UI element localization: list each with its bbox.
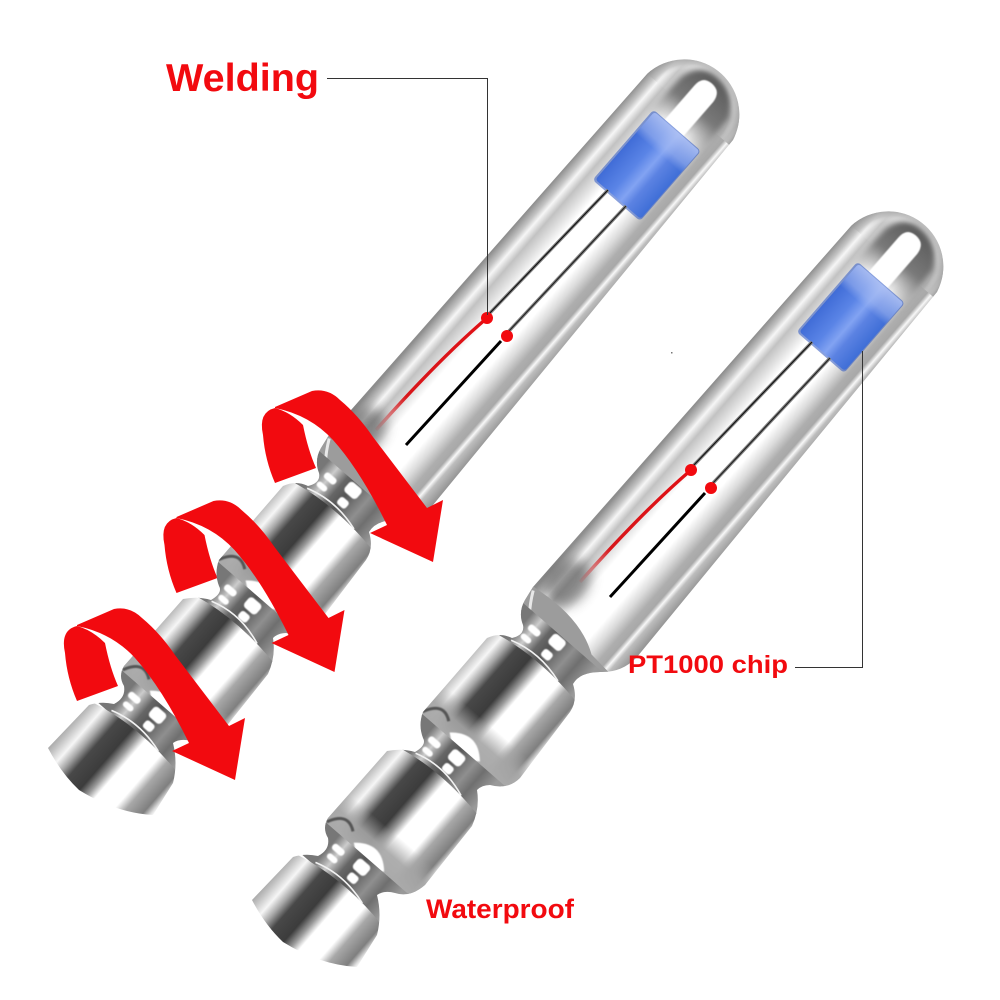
right probe (202, 150, 1000, 1000)
neck 2 (372, 694, 542, 848)
label: PT1000 chip: PT1000 chip (628, 651, 788, 679)
icon: PT1000 chip (797, 262, 905, 373)
label: Welding: Welding (166, 57, 319, 100)
neck 3 (277, 803, 447, 958)
bump 1 and neck (471, 580, 640, 735)
weld points (685, 464, 717, 494)
callout: Welding leader (327, 78, 488, 315)
label: Waterproof: Waterproof (426, 894, 575, 924)
rotation arrows (77, 390, 443, 780)
speck (671, 352, 672, 354)
left probe (0, 0, 810, 893)
wires (580, 342, 830, 597)
callout: PT1000 chip leader (795, 351, 862, 668)
rotation arrow flaps (64, 408, 316, 701)
